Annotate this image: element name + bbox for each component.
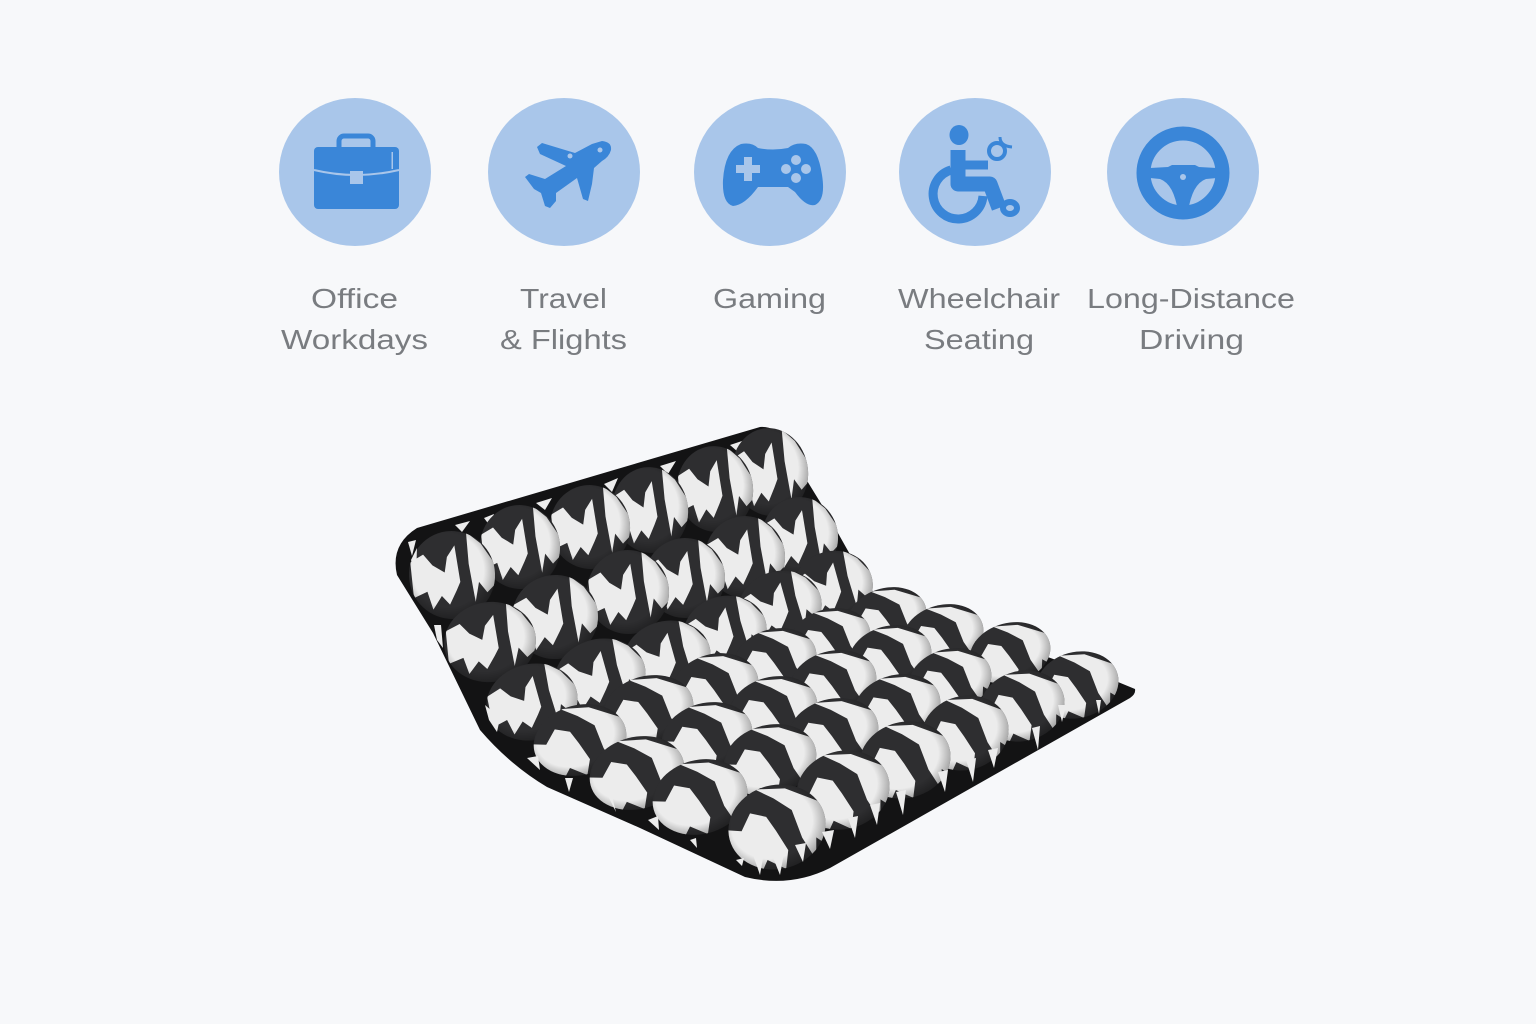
label: Long-Distance Driving: Driving xyxy=(1139,324,1244,355)
icon: wheelchair user xyxy=(933,125,1017,219)
icon: steering wheel xyxy=(1144,134,1222,212)
top edge white slivers xyxy=(408,440,745,556)
icon circle: travel xyxy=(488,98,640,246)
label: Office Workdays: Office xyxy=(311,283,398,314)
label: Wheelchair Seating: Wheelchair xyxy=(898,283,1060,314)
icon: briefcase xyxy=(314,136,399,209)
bubbles: seat row 5 xyxy=(579,594,994,822)
icon circle: gaming xyxy=(694,98,846,246)
label: Wheelchair Seating: Seating xyxy=(924,324,1034,355)
use case: Office Workdays xyxy=(279,98,431,355)
use case: Wheelchair Seating xyxy=(898,98,1060,355)
label: Gaming: Gaming xyxy=(713,283,826,314)
bubbles: backrest row 2 xyxy=(439,492,844,688)
label: Wheelchair Seating xyxy=(898,283,1060,355)
use case: Gaming xyxy=(694,98,846,314)
icon: game controller xyxy=(723,144,823,206)
label: Travel and Flights: & Flights xyxy=(500,324,627,355)
cushion base xyxy=(396,427,1135,881)
use case: Travel and Flights xyxy=(488,98,640,355)
label: Long-Distance Driving: Long-Distance xyxy=(1087,283,1295,314)
bubbles: backrest row 1 xyxy=(403,423,815,625)
label: Office Workdays xyxy=(281,283,428,355)
product: houndstooth seat cushion xyxy=(396,423,1135,882)
label: Travel and Flights: Travel xyxy=(520,283,607,314)
bubbles: seat row 4 xyxy=(523,578,937,787)
bubbles: transition row 3 xyxy=(478,542,881,750)
label: Long-Distance Driving xyxy=(1087,283,1295,355)
icon circle: wheelchair xyxy=(899,98,1051,246)
bubbles: front row 7 xyxy=(716,641,1130,882)
label: Office Workdays: Workdays xyxy=(281,324,428,355)
bubbles: seat row 6 xyxy=(642,612,1061,846)
icon circle: office xyxy=(279,98,431,246)
icon: airplane xyxy=(525,141,611,208)
icon circle: driving xyxy=(1107,98,1259,246)
label: Travel and Flights xyxy=(500,283,627,355)
use case: Long-Distance Driving xyxy=(1087,98,1295,355)
white pattern tails on the border xyxy=(411,548,1101,875)
